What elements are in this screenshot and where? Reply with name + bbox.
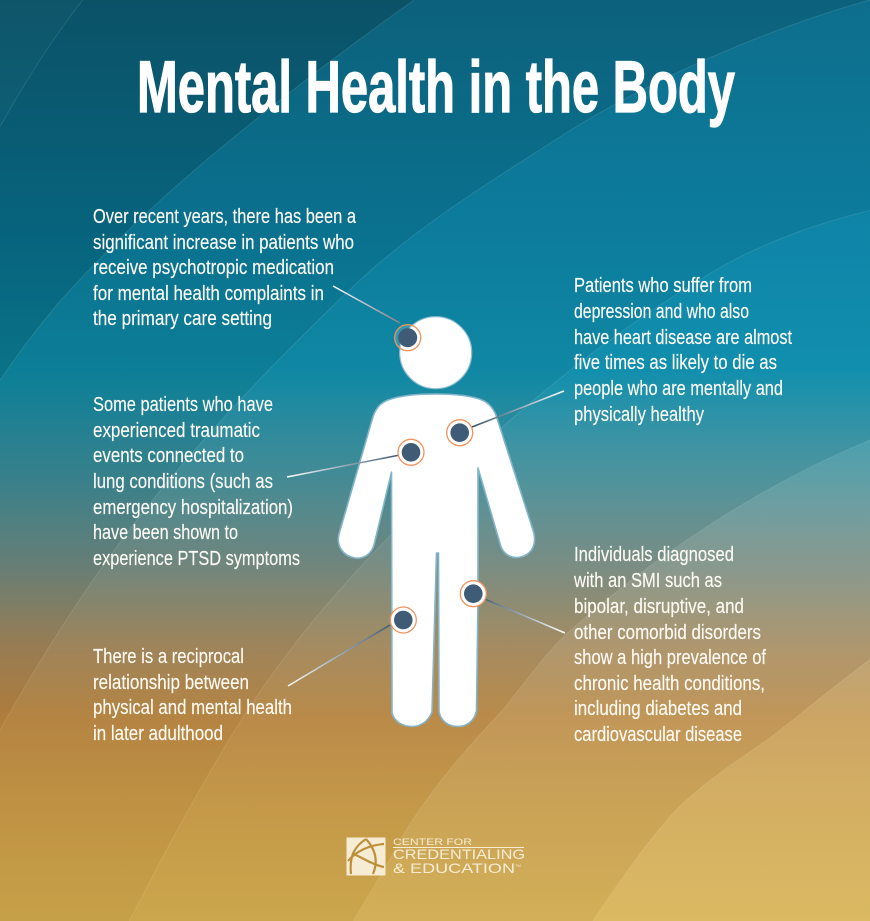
text block: later adulthood: physical and mental health bbox=[93, 697, 292, 719]
text block: later adulthood bbox=[93, 646, 292, 745]
logo wordmark: CREDENTIALING bbox=[393, 846, 525, 862]
text block: later adulthood: relationship between bbox=[93, 672, 249, 694]
text block: PTSD and lung conditions: lung conditions (such as bbox=[93, 471, 273, 493]
text block: psychotropic medication: receive psychotropic medication bbox=[93, 257, 334, 279]
logo wordmark bbox=[393, 837, 525, 876]
text block: PTSD and lung conditions: events connected to bbox=[93, 445, 244, 467]
text block: SMI and chronic conditions: with an SMI such as bbox=[573, 570, 722, 592]
text block: later adulthood: There is a reciprocal bbox=[93, 646, 244, 668]
text block: psychotropic medication: Over recent years, there has been a bbox=[93, 206, 357, 228]
text block: psychotropic medication bbox=[93, 206, 357, 330]
text block: SMI and chronic conditions: including diabetes and bbox=[574, 698, 742, 720]
text block: psychotropic medication: the primary care setting bbox=[93, 308, 272, 330]
text block: PTSD and lung conditions: have been shown to bbox=[93, 522, 238, 544]
icon: head bbox=[400, 317, 472, 389]
logo wordmark: & EDUCATION bbox=[393, 860, 515, 876]
logo wordmark: CENTER FOR bbox=[393, 837, 472, 848]
text block: depression and heart disease: depression and who also bbox=[574, 301, 749, 323]
marker: right leg bbox=[460, 581, 486, 607]
leader line: right leg bbox=[480, 597, 565, 633]
leader line: lung bbox=[287, 455, 400, 477]
leader line: heart bbox=[472, 391, 564, 427]
icon: body bbox=[338, 394, 535, 726]
text block: depression and heart disease: have heart disease are almost bbox=[574, 327, 792, 349]
text block: depression and heart disease: people who are mentally and bbox=[574, 378, 783, 400]
text block: PTSD and lung conditions bbox=[93, 394, 300, 570]
text block: psychotropic medication: significant increase in patients who bbox=[93, 232, 354, 254]
text block: SMI and chronic conditions: Individuals diagnosed bbox=[574, 544, 734, 566]
text block: depression and heart disease: Patients who suffer from bbox=[574, 275, 752, 297]
text block: SMI and chronic conditions: other comorbid disorders bbox=[574, 622, 761, 644]
text block: PTSD and lung conditions: experienced traumatic bbox=[93, 420, 260, 442]
leader line: left leg bbox=[288, 625, 390, 686]
text block: SMI and chronic conditions: chronic health conditions, bbox=[574, 673, 765, 695]
text block: PTSD and lung conditions: Some patients who have bbox=[93, 394, 273, 416]
text block: psychotropic medication: for mental health complaints in bbox=[93, 283, 324, 305]
text block: PTSD and lung conditions: emergency hospitalization) bbox=[93, 497, 293, 519]
logo wordmark: TM bbox=[515, 863, 521, 868]
leader line: head bbox=[333, 286, 400, 323]
text block: depression and heart disease: five times as likely to die as bbox=[574, 352, 777, 374]
human body figure bbox=[338, 317, 535, 726]
marker: head bbox=[395, 325, 421, 351]
text block: SMI and chronic conditions bbox=[573, 544, 766, 746]
marker: left leg bbox=[390, 607, 416, 633]
marker: lung bbox=[398, 439, 424, 465]
icon: logo globe bbox=[347, 838, 385, 875]
text block: depression and heart disease: physically healthy bbox=[574, 404, 704, 426]
marker: heart bbox=[447, 420, 473, 446]
text block: depression and heart disease bbox=[574, 275, 792, 426]
text block: SMI and chronic conditions: show a high prevalence of bbox=[574, 647, 766, 669]
text block: SMI and chronic conditions: bipolar, disruptive, and bbox=[574, 596, 744, 618]
text block: SMI and chronic conditions: cardiovascular disease bbox=[574, 724, 742, 746]
logo: Center for Credentialing & Education bbox=[347, 837, 525, 876]
text block: PTSD and lung conditions: experience PTSD symptoms bbox=[93, 548, 300, 570]
text block: later adulthood: in later adulthood bbox=[93, 723, 223, 745]
